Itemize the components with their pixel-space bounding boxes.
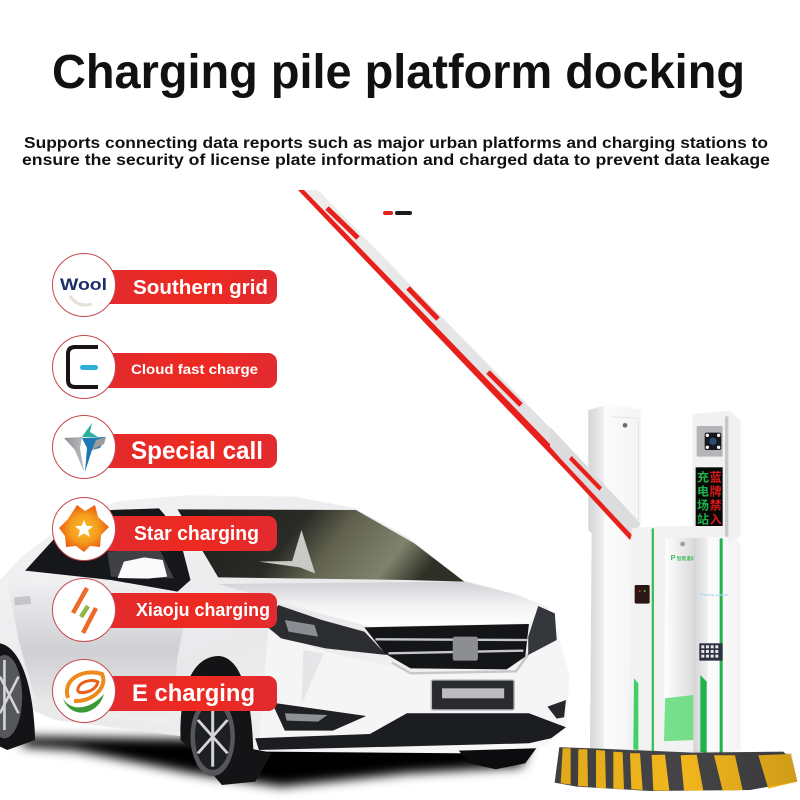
platform row: Southern grid: [52, 254, 277, 316]
barrier gate: [550, 404, 797, 791]
label pill: [100, 676, 277, 711]
LED display: 电: [697, 484, 709, 498]
LED display: 站: [697, 511, 709, 526]
LED display: 禁: [710, 497, 722, 512]
label pill: [100, 434, 277, 468]
grille: [364, 624, 529, 669]
grille badge: [453, 637, 478, 661]
front post: [693, 537, 741, 754]
cabinet logo: P 智能道闸: [671, 553, 696, 562]
lower air intake: [255, 713, 566, 750]
label pill: [100, 516, 277, 551]
barrier arm: [298, 190, 640, 540]
hazard base: [555, 747, 797, 791]
platform row: Special call: [52, 416, 277, 478]
front wheel arch and wheel: [180, 656, 272, 785]
icon: star charging logo: [52, 498, 116, 560]
icon: cloud fast charge logo: [52, 336, 116, 398]
car body: [0, 495, 570, 753]
small red and black dashes: [383, 211, 412, 215]
LED display: [696, 467, 723, 526]
LED display: 入: [710, 512, 722, 526]
car side panel: [7, 580, 185, 723]
right fog lamp: [547, 700, 566, 719]
rear wheel: [0, 643, 35, 750]
description text: ensure the security of license plate information and charged data to prevent data leakage: [22, 152, 770, 169]
car: [0, 495, 570, 787]
LED display: 场: [697, 498, 709, 512]
wing mirror: [118, 557, 167, 579]
platform row: E charging: [52, 660, 277, 722]
cabinet green pattern: [664, 695, 693, 741]
fog lamp: [272, 703, 366, 731]
windshield: [178, 509, 464, 582]
arm joint over post: [550, 427, 641, 540]
title: Charging pile platform docking: [52, 46, 745, 99]
bumper: [259, 630, 570, 740]
label text: Southern grid: [133, 277, 268, 299]
status indicator: [635, 585, 650, 604]
rear post: [588, 404, 641, 750]
display head: [692, 411, 741, 543]
platform row: Xiaoju charging: [52, 578, 277, 642]
hood: [218, 582, 544, 627]
label text: Star charging: [134, 523, 259, 545]
front right tyre: [459, 748, 536, 769]
label pill: [100, 593, 277, 628]
keypad: [699, 643, 723, 661]
label text: Special call: [131, 437, 263, 465]
car ground shadow: [22, 737, 529, 787]
icon: special call logo: [52, 416, 116, 478]
label text: E charging: [132, 680, 255, 707]
icon: Wool logo: [52, 254, 116, 316]
left headlight: [267, 605, 387, 655]
LED display: 牌: [710, 483, 722, 498]
label pill: [100, 270, 277, 304]
LED display: 蓝: [710, 469, 722, 484]
platform row: Cloud fast charge: [52, 336, 277, 398]
license plate: [431, 680, 514, 710]
label text: Cloud fast charge: [131, 361, 258, 377]
camera: [697, 426, 723, 457]
door handle: [14, 596, 31, 605]
description text: Supports connecting data reports such as major urban platforms and charging stations to: [24, 135, 768, 152]
label pill: [100, 353, 277, 388]
right headlight: [528, 606, 557, 655]
platform row: Star charging: [52, 498, 277, 560]
icon: Wool logo: Wool: [60, 275, 107, 294]
icon: Xiaoju logo: [52, 578, 116, 642]
icon: E charging logo: [52, 660, 116, 722]
description text: [22, 135, 770, 169]
barrier cabinet: [628, 526, 697, 753]
post logo: Parking system: [700, 592, 729, 598]
label text: Xiaoju charging: [136, 600, 270, 620]
LED display: 充: [697, 469, 709, 484]
car side windows: [25, 508, 190, 592]
